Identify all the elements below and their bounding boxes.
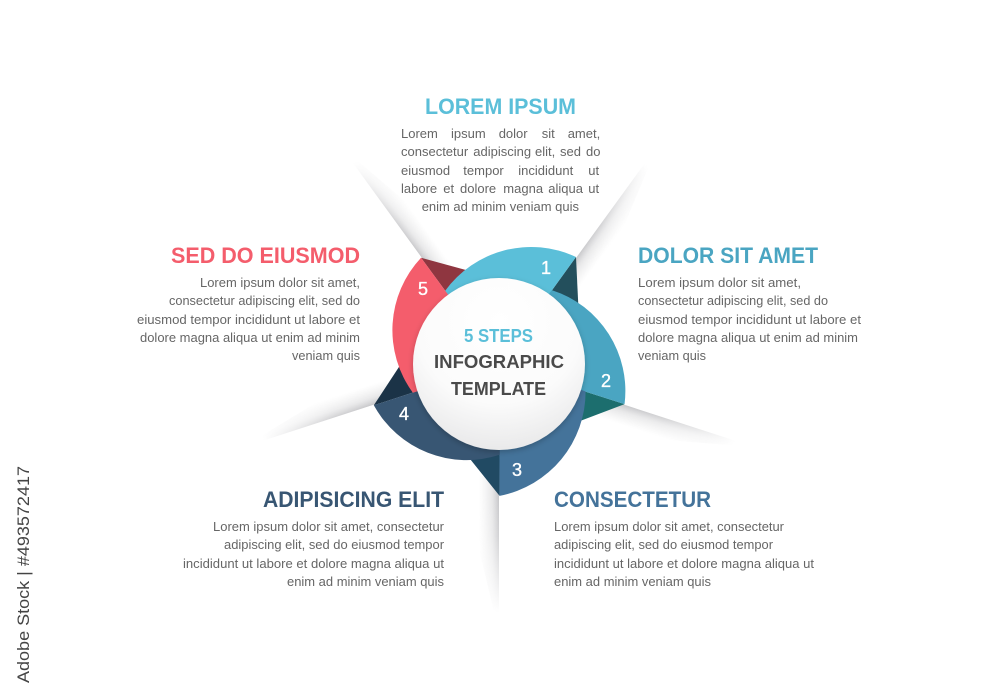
segment: step 2 xyxy=(482,276,634,437)
segment: step 1 xyxy=(445,247,576,364)
text block: step 5: eiusmod tempor incididunt ut labore et xyxy=(137,312,360,327)
text block: step 1: eiusmod xyxy=(401,163,450,178)
text block: step 1: sit xyxy=(542,126,555,141)
segment: step 3: 3 xyxy=(512,460,522,480)
heading: step 5: SED DO EIUSMOD xyxy=(171,243,360,268)
text block: step 1: Lorem xyxy=(401,126,438,141)
center title: TEMPLATE xyxy=(451,379,546,399)
text block: step 1: dolor xyxy=(499,126,528,141)
text block: step 2: veniam quis xyxy=(638,348,706,363)
text block: step 1: consectetur xyxy=(401,144,469,159)
fold: step 3 xyxy=(460,430,521,498)
center title: 5 STEPS xyxy=(464,326,533,346)
text block: step 1: amet, xyxy=(568,126,600,141)
text block: step 4: enim ad minim veniam quis xyxy=(287,574,444,589)
ray shadow: lower left xyxy=(276,386,386,436)
heading: step 3: CONSECTETUR xyxy=(554,487,711,512)
text block: step 3: adipiscing elit, sed do eiusmod tempor xyxy=(554,537,774,552)
heading: step 1: LOREM IPSUM xyxy=(425,94,576,119)
text block: step 2: eiusmod tempor incididunt ut labore et xyxy=(638,312,861,327)
text block: step 4: incididunt ut labore et dolore magna aliqua ut xyxy=(183,556,444,571)
fold: step 2 xyxy=(557,379,625,426)
side credit text: Adobe Stock | #493572417 xyxy=(14,466,33,683)
segment: step 5 xyxy=(371,255,523,415)
text block: step 2: Lorem ipsum dolor sit amet, xyxy=(638,275,801,290)
text block: step 5: veniam quis xyxy=(292,348,360,363)
text block: step 1 xyxy=(401,126,600,214)
segment: step 2: 2 xyxy=(601,371,611,391)
text block: step 4 xyxy=(183,519,445,589)
fold: step 4 xyxy=(371,353,432,421)
text block: step 1: aliqua xyxy=(548,181,584,196)
segment: step 1: 1 xyxy=(541,258,551,278)
text block: step 3: incididunt ut labore et dolore magna aliqua ut xyxy=(554,556,814,571)
text block: step 1: ipsum xyxy=(451,126,486,141)
text block: step 1: do xyxy=(586,144,600,159)
text block: step 5: dolore magna aliqua ut enim ad minim xyxy=(140,330,360,345)
text block: step 2: dolore magna aliqua ut enim ad minim xyxy=(638,330,858,345)
text block: step 1: magna xyxy=(503,181,544,196)
text block: step 1: labore xyxy=(401,181,437,196)
heading: step 2: DOLOR SIT AMET xyxy=(638,243,819,268)
ray shadow: bottom xyxy=(485,478,499,598)
text block: step 5: consectetur adipiscing elit, sed do xyxy=(169,293,360,308)
segment: step 4 xyxy=(368,319,543,490)
center title: INFOGRAPHIC xyxy=(434,352,564,372)
text block: step 1: tempor xyxy=(463,163,504,178)
text block: step 1: sed xyxy=(560,144,581,159)
text block: step 5: Lorem ipsum dolor sit amet, xyxy=(200,275,360,290)
text block: step 1: adipiscing xyxy=(473,144,531,159)
text block: step 4: adipiscing elit, sed do eiusmod tempor xyxy=(224,537,445,552)
text block: step 3: enim ad minim veniam quis xyxy=(554,574,711,589)
text block: step 5 xyxy=(137,275,360,363)
text block: step 1: incididunt xyxy=(518,163,574,178)
text block: step 1: et xyxy=(443,181,455,196)
text block: step 1: elit, xyxy=(535,144,555,159)
fold: step 1 xyxy=(550,257,579,320)
ray shadow: lower right xyxy=(603,404,720,438)
center title xyxy=(434,326,564,399)
text block: step 3 xyxy=(554,519,814,589)
text block: step 2: consectetur adipiscing elit, sed do xyxy=(638,293,828,308)
heading: step 4: ADIPISICING ELIT xyxy=(263,487,445,512)
ray shadow: top right xyxy=(576,176,637,280)
text block: step 1: ut xyxy=(588,181,600,196)
text block: step 3: Lorem ipsum dolor sit amet, consectetur xyxy=(554,519,785,534)
center circle xyxy=(413,278,585,450)
segment: step 4: 4 xyxy=(399,404,409,424)
ray shadow: top left xyxy=(362,176,444,264)
text block: step 1: enim ad minim veniam quis xyxy=(422,199,579,214)
segment: step 5: 5 xyxy=(418,279,428,299)
fold: step 5 xyxy=(413,255,482,302)
text block: step 2 xyxy=(638,275,861,363)
segment: step 3 xyxy=(437,332,611,504)
text block: step 4: Lorem ipsum dolor sit amet, consectetur xyxy=(213,519,445,534)
text block: step 1: ut xyxy=(588,163,600,178)
text block: step 1: dolore xyxy=(460,181,496,196)
